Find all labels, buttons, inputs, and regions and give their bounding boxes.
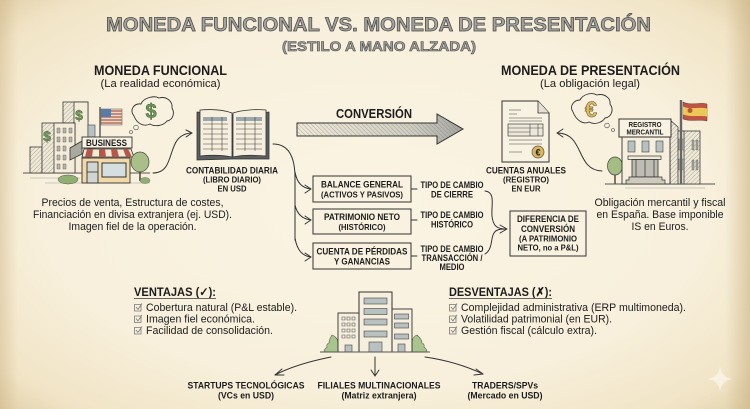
text: funcional description: Financiación en divisa extranjera (ej. USD). [33,209,232,221]
label: filiales: (Matriz extranjera) [342,390,416,400]
label: cuentas anuales: (REGISTRO) [503,174,549,184]
icon: sparkle [707,366,733,392]
panel: moneda funcional heading: MONEDA FUNCIONAL [94,62,227,78]
icon: open ledger [197,110,269,160]
box: balance general: (ACTIVOS Y PASIVOS) [321,190,403,200]
icon: corporate buildings [320,292,430,352]
label: tipo de cambio historico [420,210,484,230]
label: contabilidad diaria: CONTABILIDAD DIARIA [186,166,278,176]
text: presentacion description: IS en Euros. [632,221,688,233]
text: presentacion description [594,197,726,233]
icon: usa flag [100,107,122,138]
label: tipo de cambio transaccion [420,244,484,272]
box: diferencia de conversion: CONVERSIÓN [521,223,575,234]
text: funcional description [33,197,232,233]
subtitle: (ESTILO A MANO ALZADA) [282,39,476,54]
arrows: ledger to statements [273,144,311,261]
arrow: registry to accounts [557,129,602,171]
panel: moneda funcional heading: (La realidad económica) [100,78,220,90]
icon: city and business shop [23,102,150,184]
icon: annual accounts document [502,101,549,162]
panel: desventajas: Complejidad administrativa (ERP multimoneda). [461,302,686,314]
panel: ventajas: Facilidad de consolidación. [146,325,273,337]
arrows: to use cases [275,357,483,376]
label: conversion: CONVERSIÓN [336,106,412,121]
arrows: rates to conversion difference [485,191,507,254]
panel: moneda de presentacion heading [501,61,680,90]
label: traders: (Mercado en USD) [468,390,542,400]
box: diferencia de conversion [510,211,586,256]
label: contabilidad diaria: EN USD [218,184,246,194]
label: tipo de cambio transaccion: MEDIO [440,262,465,272]
box: balance general [313,176,411,202]
text: funcional description: Imagen fiel de la operación. [68,221,196,233]
label: cuentas anuales: CUENTAS ANUALES [486,166,566,176]
panel: ventajas: Imagen fiel económica. [146,314,255,326]
box: diferencia de conversion: NETO, no a P&L) [518,242,579,252]
building sign: MERCANTIL [626,128,664,136]
shop sign: BUSINESS [86,138,127,148]
label: startups: (VCs en USD) [218,390,274,400]
label: cuentas anuales: EN EUR [512,184,541,194]
icon: annual accounts document: € [535,148,541,158]
icon: dollar thought bubble: $ [145,101,157,123]
label: traders [468,380,542,400]
panel: moneda de presentacion heading: MONEDA DE PRESENTACIÓN [501,61,680,78]
label: tipo de cambio transaccion: TIPO DE CAMBIO [420,244,484,254]
label: tipo de cambio de cierre: TIPO DE CAMBIO [420,180,484,190]
label: cuentas anuales [486,166,566,194]
box: patrimonio neto: PATRIMONIO NETO [324,212,400,222]
box: balance general: BALANCE GENERAL [321,180,403,190]
text: presentacion description: en España. Base imponible [596,209,724,221]
building sign [619,119,671,137]
panel: ventajas: VENTAJAS (✓): [134,285,216,299]
panel: desventajas: Gestión fiscal (cálculo extra). [461,325,597,337]
box: cuenta de perdidas y ganancias: CUENTA DE PÉRDIDAS [316,246,408,256]
label: tipo de cambio de cierre: DE CIERRE [431,190,473,200]
panel: ventajas: Cobertura natural (P&L estable). [146,302,297,314]
panel: desventajas: DESVENTAJAS (✗): [449,285,552,299]
icon: euro thought bubble: € [585,97,597,122]
label: tipo de cambio historico: TIPO DE CAMBIO [420,210,484,220]
label: contabilidad diaria: (LIBRO DIARIO) [203,174,261,184]
label: filiales: FILIALES MULTINACIONALES [318,380,440,390]
box: patrimonio neto [313,209,411,234]
box: cuenta de perdidas y ganancias: Y GANANCIAS [334,256,390,266]
box: diferencia de conversion: (A PATRIMONIO [519,234,577,244]
icon: city and business shop: $ [43,128,51,144]
panel: moneda de presentacion heading: (La obligación legal) [540,78,640,90]
icon: checkboxes [134,304,142,334]
building sign: REGISTRO [628,120,662,129]
label: tipo de cambio transaccion: TRANSACCIÓN / [422,252,483,263]
label: tipo de cambio historico: HISTÓRICO [431,218,473,230]
arrow: shop to ledger [153,130,192,173]
text: funcional description: Precios de venta, Estructura de costes, [42,197,224,209]
connector ticks [411,189,417,256]
panel: desventajas: Volatilidad patrimonial (en EUR). [461,314,612,326]
label: startups [188,380,304,400]
title: MONEDA FUNCIONAL VS. MONEDA DE PRESENTACIÓN [106,12,651,36]
panel: ventajas [134,285,297,337]
icon: spain flag [681,100,707,184]
arrow: conversion [297,114,463,144]
panel: desventajas [449,285,686,337]
box: diferencia de conversion: DIFERENCIA DE [517,214,579,224]
icon: dollar thought bubble [130,97,173,134]
text: presentacion description: Obligación mercantil y fiscal [594,197,726,209]
icon: euro thought bubble [572,94,614,132]
label: contabilidad diaria [186,166,278,194]
label: traders: TRADERS/SPVs [472,380,538,390]
icon: city and business shop: $ [75,107,83,123]
label: tipo de cambio de cierre [420,180,484,200]
label: startups: STARTUPS TECNOLÓGICAS [188,380,304,390]
panel: moneda funcional heading [94,62,227,90]
box: cuenta de perdidas y ganancias [313,243,411,269]
icon: registro mercantil building [605,100,715,188]
box: patrimonio neto: (HISTÓRICO) [338,221,386,232]
label: filiales [318,380,440,400]
icon: checkboxes [450,304,457,334]
